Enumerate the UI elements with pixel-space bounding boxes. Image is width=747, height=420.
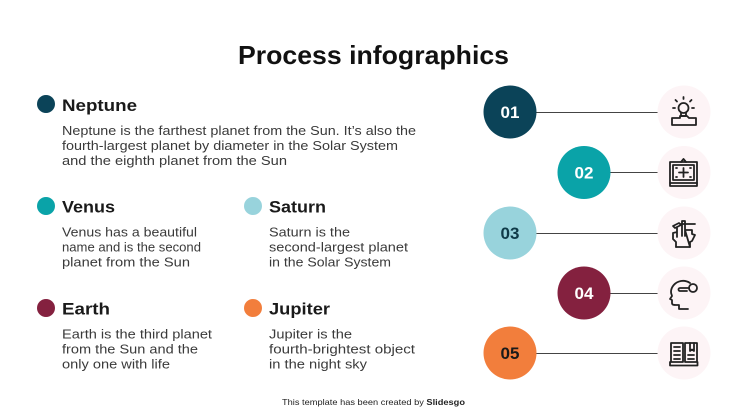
Neptune dot — [37, 95, 55, 113]
Venus heading: Venus — [62, 198, 115, 216]
process step 03: 03 — [501, 224, 519, 243]
Neptune text: Neptune is the farthest planet from the Sun. It’s also the — [62, 123, 416, 138]
footer credit: This template has been created by Slidesgo — [282, 397, 465, 407]
process step 02 — [558, 146, 710, 199]
process step 05: 05 — [501, 344, 519, 363]
Earth text: only one with life — [62, 356, 170, 372]
Neptune heading: Neptune — [62, 96, 137, 115]
Jupiter text: fourth-brightest object — [269, 342, 415, 356]
Saturn text: second-largest planet — [269, 240, 408, 254]
Jupiter text: in the night sky — [269, 356, 368, 372]
Venus dot — [37, 197, 55, 215]
Jupiter text: Jupiter is the — [269, 326, 352, 342]
icon: head with key — [670, 281, 697, 309]
Venus text: name and is the second — [62, 240, 201, 254]
Jupiter dot — [244, 299, 262, 317]
process step 04 — [558, 266, 710, 320]
process step 03 — [484, 206, 710, 260]
icon: open book — [670, 343, 698, 366]
process step 01: 01 — [501, 103, 519, 122]
Earth text — [62, 326, 212, 372]
Saturn text: Saturn is the — [269, 224, 350, 240]
process step 01 — [484, 86, 710, 138]
Saturn heading: Saturn — [269, 198, 326, 216]
Earth text: from the Sun and the — [62, 342, 198, 356]
Venus text — [62, 224, 201, 270]
Saturn dot — [244, 197, 262, 215]
icon: framed board — [670, 159, 697, 186]
icon: hand with crossed fingers — [673, 221, 695, 247]
process step 02: 02 — [575, 164, 593, 182]
Venus text: planet from the Sun — [62, 254, 190, 270]
process step 04: 04 — [575, 284, 594, 303]
Neptune text — [62, 123, 416, 168]
Jupiter text — [269, 326, 415, 372]
panel: Earth — [37, 299, 212, 372]
panel: Venus — [37, 197, 201, 270]
icon: light bulb idea — [672, 97, 696, 125]
panel: Jupiter — [244, 299, 415, 372]
Saturn text — [269, 224, 408, 270]
Saturn text: in the Solar System — [269, 254, 391, 270]
Neptune text: fourth-largest planet by diameter in the Solar System — [62, 138, 398, 153]
panel: Saturn — [244, 197, 408, 270]
Jupiter heading: Jupiter — [269, 300, 330, 318]
Neptune text: and the eighth planet from the Sun — [62, 153, 287, 168]
Earth text: Earth is the third planet — [62, 326, 212, 342]
Earth heading: Earth — [62, 300, 110, 318]
title: Process infographics — [238, 40, 509, 70]
panel: Neptune — [37, 95, 416, 168]
process step 05 — [484, 326, 710, 380]
Earth dot — [37, 299, 55, 317]
Venus text: Venus has a beautiful — [62, 224, 197, 240]
